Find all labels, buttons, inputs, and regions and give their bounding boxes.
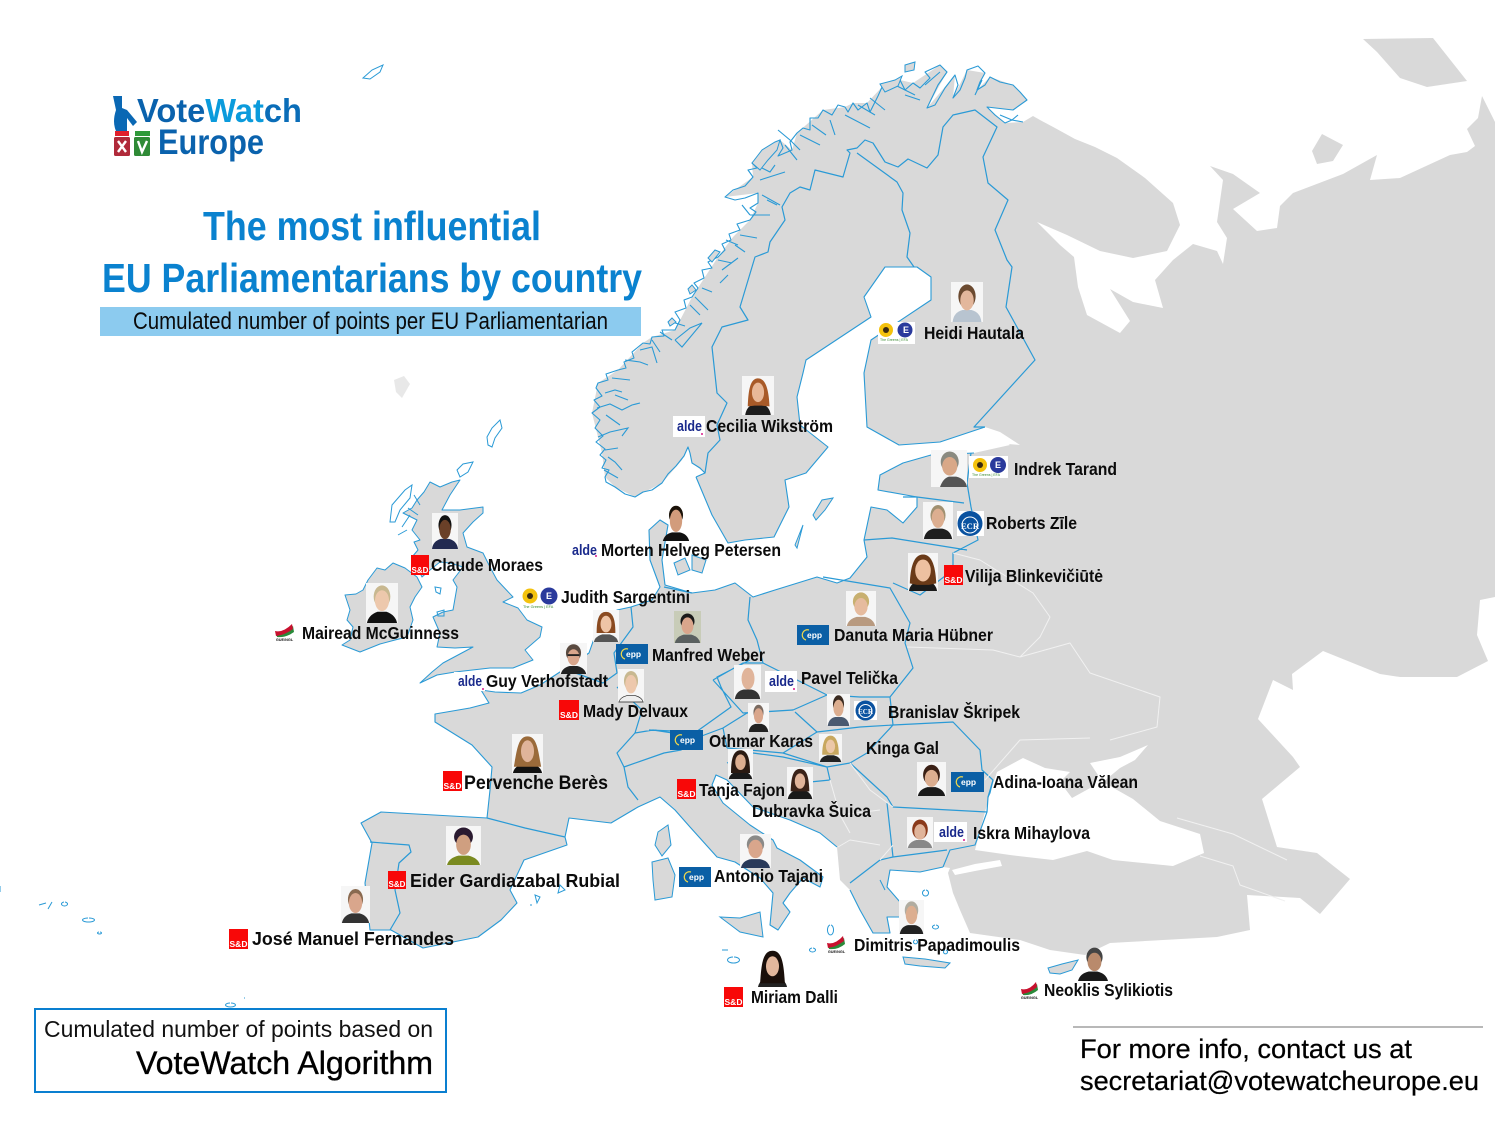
non-EU light borders [830, 553, 1287, 901]
name: Mairead McGuinness [302, 623, 459, 643]
Sicily [720, 912, 763, 937]
name: Antonio Tajani [714, 866, 823, 886]
logo: ECR [957, 511, 984, 536]
photo [819, 734, 842, 762]
MEP: Morten Helveg Petersen [572, 506, 781, 560]
logo: ECR: ECR [961, 521, 980, 531]
logo: EPP [951, 772, 984, 792]
name: Claude Moraes [431, 555, 543, 575]
logo: EPP: epp [689, 872, 704, 882]
icon: no and yes ballot boxes [114, 131, 150, 156]
callout: algorithm note: Cumulated number of points based on [44, 1016, 433, 1042]
photo [560, 643, 587, 674]
logo: Greens/EFA: E [546, 591, 552, 601]
photo [618, 669, 644, 702]
logo: S&D: S&D [725, 997, 742, 1007]
logo: Greens/EFA [522, 588, 558, 609]
logo: EPP [679, 867, 711, 887]
photo [366, 583, 398, 623]
name: Indrek Tarand [1014, 459, 1117, 479]
logo: EPP [616, 644, 648, 664]
EU coastline [361, 267, 993, 948]
logo: S&D [443, 771, 462, 791]
logo: EPP [797, 625, 829, 645]
MEP: Tanja Fajon [677, 749, 785, 800]
logo: EPP: epp [961, 777, 976, 787]
MEP: Roberts Zīle [923, 502, 1077, 539]
Norway jagged coast [592, 65, 1027, 497]
logo: Greens/EFA: The Greens | EFA [880, 338, 909, 342]
MEP: Neoklis Sylikiotis [1021, 948, 1173, 1000]
Balearic Islands [530, 885, 565, 905]
contact information [1073, 1027, 1483, 1096]
subtitle band: Cumulated number of points per EU Parliamentarian [133, 308, 608, 335]
logo: S&D: S&D [945, 575, 962, 585]
MEP: Claude Moraes [411, 513, 543, 575]
MEP: Miriam Dalli [724, 951, 838, 1007]
MEP: Guy Verhofstadt [454, 643, 608, 691]
logo: GUE/NGL: GUE/NGL [828, 950, 846, 954]
logo: EPP: epp [680, 735, 695, 745]
small islands outlined in blue [0, 65, 947, 1007]
name: Manfred Weber [652, 645, 765, 665]
logo: Greens/EFA: The Greens | EFA [972, 473, 1001, 477]
name: Morten Helveg Petersen [601, 540, 781, 560]
logo: Greens/EFA: E [995, 460, 1001, 470]
photo [674, 611, 701, 643]
logo: Greens/EFA [969, 456, 1008, 478]
logo: S&D: S&D [678, 789, 695, 799]
name: Vilija Blinkevičiūtė [965, 566, 1103, 586]
photo [907, 817, 933, 848]
MEP: Branislav Škripek [827, 694, 1020, 726]
photo [846, 591, 876, 626]
name: Guy Verhofstadt [486, 671, 608, 691]
photo [734, 665, 761, 699]
photo [899, 900, 924, 934]
continental landmass [361, 65, 1495, 955]
photo [740, 834, 771, 868]
name: José Manuel Fernandes [252, 928, 454, 949]
logo: ALDE: alde [458, 673, 482, 690]
callout: algorithm note: VoteWatch Algorithm [136, 1045, 433, 1081]
logo: S&D: S&D [412, 566, 429, 575]
logo: ALDE: alde [769, 673, 794, 690]
photo [931, 450, 967, 487]
Cyprus [1048, 960, 1078, 974]
photo [951, 282, 983, 322]
Faroe Islands faint [394, 376, 410, 398]
title [102, 203, 642, 301]
photo [917, 762, 946, 796]
photo [758, 951, 787, 987]
logo: EPP [670, 730, 703, 750]
name: Eider Gardiazabal Rubial [410, 870, 620, 891]
MEP: Pervenche Berès [443, 734, 608, 794]
MEP: Pavel Telička [734, 665, 898, 699]
Shetland, Orkney, Hebrides, Man, Anglesey [390, 420, 502, 616]
Malta and Greek islands [722, 880, 947, 963]
MEP: Eider Gardiazabal Rubial [388, 826, 620, 891]
name: Miriam Dalli [751, 987, 838, 1007]
logo: Greens/EFA: E [903, 325, 909, 335]
name: Kinga Gal [866, 738, 939, 758]
name: Tanja Fajon [699, 780, 785, 800]
name: Pervenche Berès [464, 773, 608, 794]
name: Neoklis Sylikiotis [1044, 980, 1173, 1000]
MEP: Dimitris Papadimoulis [827, 900, 1020, 955]
Sea of Marmara [952, 860, 1002, 875]
photo [663, 506, 689, 541]
Black Sea and Sea of Azov [975, 745, 1204, 866]
MEP: Adina-Ioana Vălean [917, 762, 1138, 796]
MEP: Iskra Mihaylova [907, 817, 1090, 848]
Danish islands [674, 555, 706, 575]
contact information: For more info, contact us at [1080, 1034, 1413, 1064]
logo: GUE/NGL: GUE/NGL [1021, 996, 1039, 1000]
title: The most influential [203, 203, 541, 249]
logo: ECR [854, 700, 877, 720]
MEP: Judith Sargentini [522, 587, 690, 642]
logo: VoteWatch Europe: Europe [158, 123, 264, 162]
MEP: José Manuel Fernandes [229, 886, 454, 949]
name: Adina-Ioana Vălean [993, 772, 1138, 792]
photo [728, 749, 753, 779]
logo: S&D [944, 565, 963, 585]
logo: EPP: epp [807, 630, 822, 640]
MEP: Vilija Blinkevičiūtė [908, 553, 1103, 591]
name: Dimitris Papadimoulis [854, 935, 1020, 955]
photo [593, 610, 619, 642]
MEP: Danuta Maria Hübner [797, 591, 993, 645]
photo [908, 553, 938, 591]
Corsica and Sardinia [652, 825, 675, 900]
Azores [0, 886, 102, 934]
logo: GUE/NGL: GUE/NGL [276, 638, 294, 642]
logo wordmark: VoteWatch [137, 92, 302, 129]
logo: ALDE [934, 822, 967, 842]
Crete [903, 957, 950, 968]
name: Danuta Maria Hübner [834, 625, 993, 645]
logo: Greens/EFA [878, 322, 915, 344]
Lake Ladoga [985, 427, 1020, 445]
title: EU Parliamentarians by country [102, 255, 642, 301]
photo [1078, 948, 1108, 981]
photo [787, 767, 813, 799]
logo: S&D: S&D [230, 939, 247, 949]
MEP: Dubravka Šuica [752, 767, 871, 821]
name: Mady Delvaux [583, 701, 688, 721]
photo [742, 376, 774, 415]
photo [512, 734, 543, 773]
name: Dubravka Šuica [752, 800, 871, 821]
photo [432, 513, 458, 549]
Great Britain [403, 480, 542, 683]
photo [923, 502, 953, 539]
name: Branislav Škripek [888, 701, 1020, 722]
logo: GUE/NGL [827, 936, 846, 954]
logo: ECR: ECR [858, 708, 874, 716]
photo [341, 886, 370, 923]
logo: ALDE [765, 671, 797, 692]
logo: ALDE: alde [939, 824, 964, 841]
Norway fjords and islands [597, 72, 1018, 478]
logo: S&D: S&D [389, 880, 406, 889]
name: Judith Sargentini [561, 587, 690, 607]
MEP: Othmar Karas [670, 703, 813, 751]
logo: S&D: S&D [444, 781, 461, 791]
MEP: Indrek Tarand [931, 450, 1117, 487]
MEP: Cecilia Wikström [673, 376, 833, 437]
MEP: Kinga Gal [819, 734, 939, 762]
photo [827, 694, 850, 726]
logo: Greens/EFA: The Greens | EFA [523, 605, 554, 609]
photo [748, 703, 769, 732]
logo: ALDE: alde [572, 542, 597, 559]
MEP: Heidi Hautala [878, 282, 1024, 344]
Gotland [795, 498, 833, 548]
logo: GUE/NGL [1021, 982, 1039, 1000]
logo: S&D [388, 871, 406, 889]
logo: S&D [229, 929, 248, 949]
name: Iskra Mihaylova [973, 823, 1090, 843]
EU land borders [370, 110, 1035, 930]
Canary Islands [226, 998, 245, 1007]
Norwegian outer islands [668, 62, 915, 326]
icon: voter figure [113, 96, 137, 131]
name: Othmar Karas [709, 731, 813, 751]
name: Roberts Zīle [986, 513, 1077, 533]
MEP: Mairead McGuinness [275, 583, 459, 643]
logo: S&D: S&D [560, 710, 578, 720]
logo: GUE/NGL [275, 624, 294, 642]
Novaya Zemlya and Kolguev [1312, 38, 1467, 164]
MEP: Manfred Weber [616, 611, 765, 665]
name: Cecilia Wikström [706, 416, 833, 436]
contact information: secretariat@votewatcheurope.eu [1080, 1066, 1479, 1096]
name: Heidi Hautala [924, 323, 1024, 343]
MEP: Antonio Tajani [679, 834, 823, 887]
callout: algorithm note [35, 1009, 446, 1092]
Ireland [342, 563, 422, 652]
logo: ALDE: alde [677, 418, 702, 435]
name: Pavel Telička [801, 668, 898, 688]
Jan Mayen [363, 65, 383, 79]
MEP: Mady Delvaux [559, 669, 688, 721]
photo [446, 826, 481, 865]
logo: VoteWatch Europe [113, 92, 302, 162]
logo: EPP: epp [626, 649, 641, 659]
logo: ALDE [673, 416, 705, 437]
